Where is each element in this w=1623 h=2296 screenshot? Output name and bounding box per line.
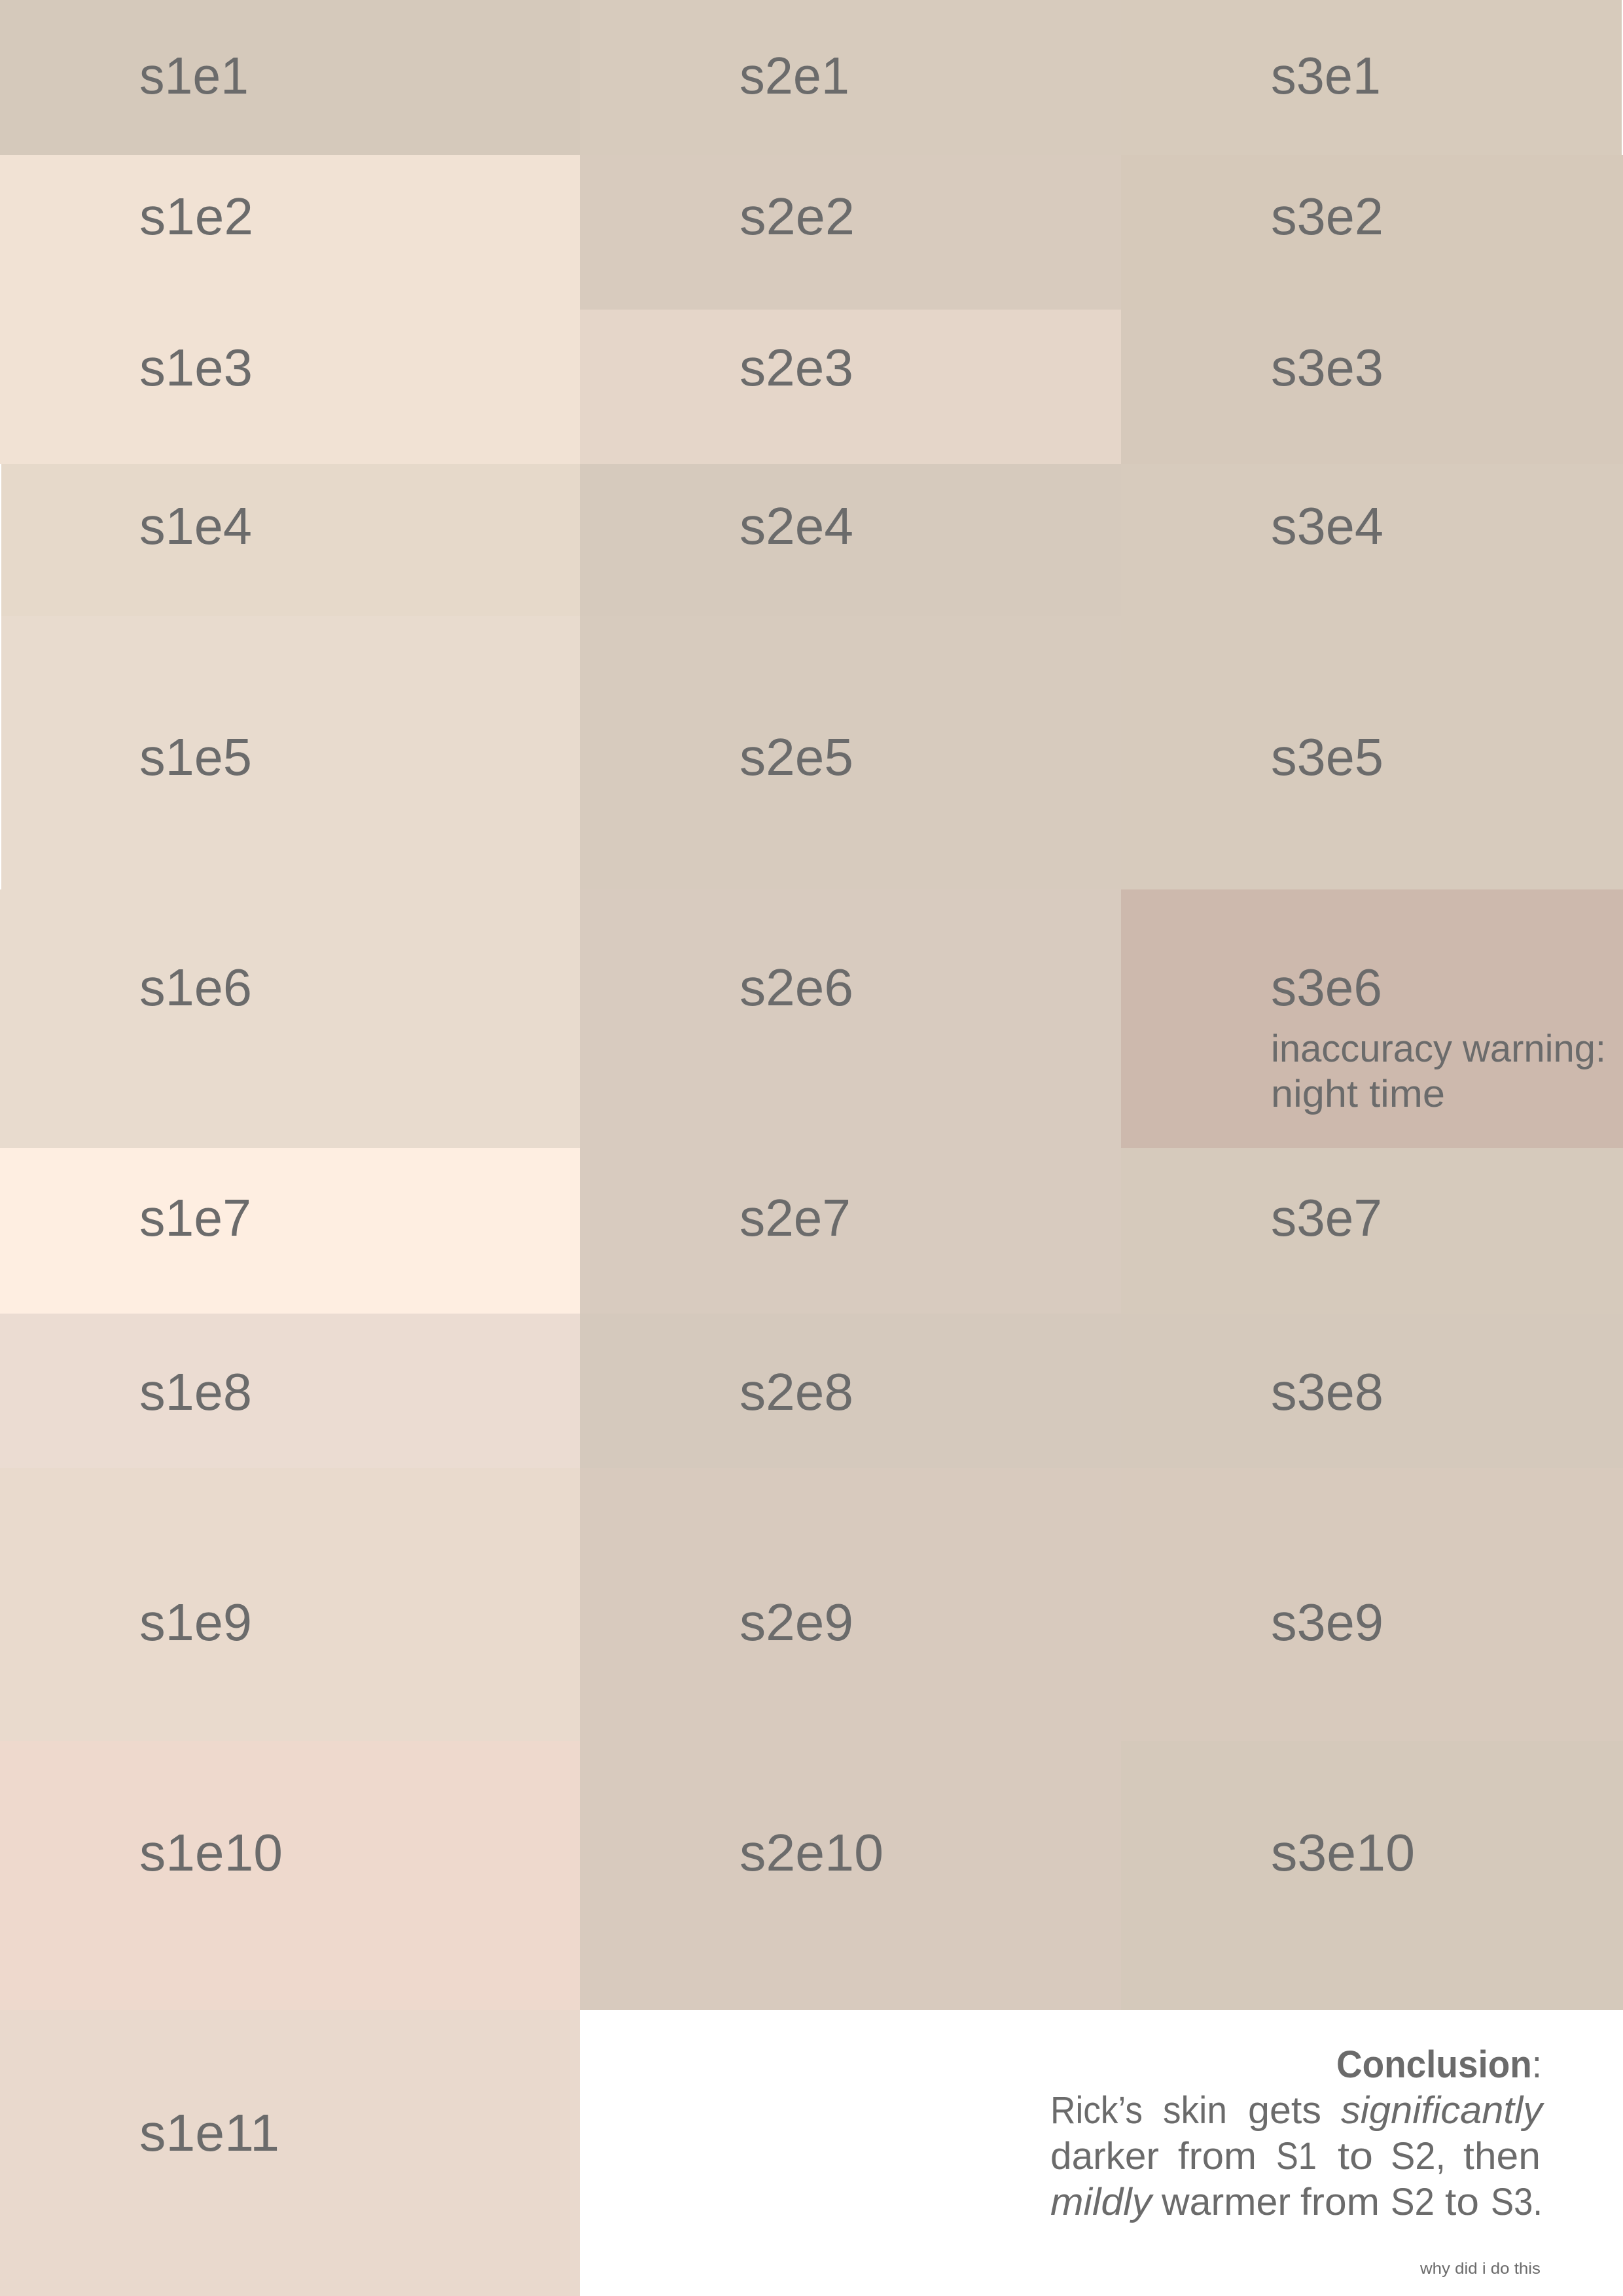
cell: s1e10: s1e10	[139, 1823, 283, 1882]
conclusion line 1: skin	[1163, 2089, 1227, 2132]
conclusion line 3: S3.	[1491, 2181, 1543, 2223]
cell: s3e1: s3e1	[1271, 46, 1381, 105]
cell: s3e9: s3e9	[1271, 1593, 1383, 1651]
conclusion line 2	[1050, 2135, 1541, 2178]
heading: conclusion: Conclusion:	[1336, 2043, 1542, 2086]
panel: season 1 column	[0, 0, 580, 2296]
cell: s2e10: s2e10	[740, 1823, 883, 1882]
conclusion line 3: S2	[1391, 2181, 1435, 2223]
cell: s1e9: s1e9	[139, 1593, 252, 1651]
cell: s1e5: s1e5	[139, 728, 252, 786]
cell: s3e1	[1121, 0, 1622, 155]
panel: season 2 column	[580, 0, 1121, 2010]
cell: s3e5	[1121, 616, 1623, 889]
cell: s3e3: s3e3	[1271, 338, 1383, 397]
cell: s2e2	[580, 155, 1121, 310]
cell: s1e3: s1e3	[139, 338, 253, 397]
cell: s2e1: s2e1	[740, 46, 849, 105]
cell: s2e7	[580, 1148, 1121, 1314]
cell: s1e8	[0, 1314, 580, 1468]
cell: s2e4	[580, 464, 1121, 616]
conclusion line 2: darker	[1050, 2135, 1159, 2178]
cell: s1e7	[0, 1148, 580, 1314]
conclusion line 3: warmer	[1161, 2181, 1291, 2223]
cell: s1e1: s1e1	[139, 46, 249, 105]
cell: s2e1	[580, 0, 1121, 155]
cell: s3e6 with inaccuracy warning: inaccuracy warning:	[1271, 1028, 1606, 1070]
footnote: why did i do this	[1419, 2260, 1541, 2278]
cell: s3e6 with inaccuracy warning: s3e6	[1271, 958, 1382, 1016]
cell: s1e5	[1, 616, 580, 889]
conclusion line 1	[1050, 2089, 1544, 2132]
cell: s3e10	[1121, 1741, 1623, 2010]
conclusion line 1: significantly	[1341, 2089, 1544, 2132]
panel: season 3 column	[1121, 0, 1623, 2010]
cell: s1e11	[0, 2010, 580, 2296]
cell: s2e4: s2e4	[740, 497, 853, 555]
cell: s3e3	[1121, 310, 1623, 464]
cell: s2e8	[580, 1314, 1121, 1468]
cell: s2e7: s2e7	[740, 1189, 851, 1247]
conclusion line 3: from	[1300, 2181, 1380, 2223]
conclusion line 2: from	[1178, 2135, 1257, 2178]
cell: s1e1	[0, 0, 580, 155]
conclusion line 1: gets	[1248, 2089, 1321, 2132]
conclusion line 2: S2,	[1391, 2135, 1446, 2178]
cell: s2e5	[580, 616, 1121, 889]
conclusion line 2: to	[1338, 2135, 1373, 2178]
text block: conclusion	[1050, 2043, 1544, 2223]
cell: s3e6 with inaccuracy warning: night time	[1271, 1073, 1445, 1115]
cell: s2e5: s2e5	[740, 728, 853, 786]
conclusion line 2: then	[1463, 2135, 1541, 2178]
cell: s2e10	[580, 1741, 1121, 2010]
cell: s3e2	[1121, 155, 1623, 310]
cell: s1e3	[0, 310, 580, 464]
conclusion line 1: Rick’s	[1050, 2089, 1143, 2132]
cell: s2e8: s2e8	[740, 1363, 853, 1421]
cell: s1e6	[0, 889, 580, 1148]
cell: s2e6: s2e6	[740, 958, 853, 1016]
cell: s1e2: s1e2	[139, 187, 253, 245]
cell: s3e10: s3e10	[1271, 1823, 1415, 1882]
cell: s3e7: s3e7	[1271, 1189, 1382, 1247]
cell: s3e6 with inaccuracy warning	[1121, 889, 1623, 1148]
cell: s2e9: s2e9	[740, 1593, 853, 1651]
conclusion line 3: mildly	[1050, 2181, 1154, 2223]
conclusion line 2: S1	[1276, 2135, 1317, 2178]
cell: s3e5: s3e5	[1271, 728, 1383, 786]
cell: s1e7: s1e7	[139, 1189, 251, 1247]
cell: s1e6: s1e6	[139, 958, 252, 1016]
cell: s1e10	[0, 1741, 580, 2010]
cell: s3e9	[1121, 1468, 1623, 1741]
cell: s1e4	[1, 464, 580, 616]
cell: s1e8: s1e8	[139, 1363, 252, 1421]
cell: s2e3: s2e3	[740, 338, 853, 397]
conclusion line 3	[1050, 2181, 1543, 2223]
cell: s3e4: s3e4	[1271, 497, 1383, 555]
cell: s1e11: s1e11	[139, 2104, 279, 2162]
cell: s1e2	[0, 155, 580, 310]
conclusion line 3: to	[1445, 2181, 1479, 2223]
cell: s1e4: s1e4	[139, 497, 252, 555]
cell: s3e4	[1121, 464, 1623, 616]
cell: s2e3	[580, 310, 1121, 464]
cell: s3e2: s3e2	[1271, 187, 1383, 245]
cell: s3e7	[1121, 1148, 1623, 1314]
cell: s2e6	[580, 889, 1121, 1148]
cell: s3e8: s3e8	[1271, 1363, 1383, 1421]
cell: s2e9	[580, 1468, 1121, 1741]
cell: s2e2: s2e2	[740, 187, 855, 245]
cell: s1e9	[0, 1468, 580, 1741]
cell: s3e8	[1121, 1314, 1623, 1468]
